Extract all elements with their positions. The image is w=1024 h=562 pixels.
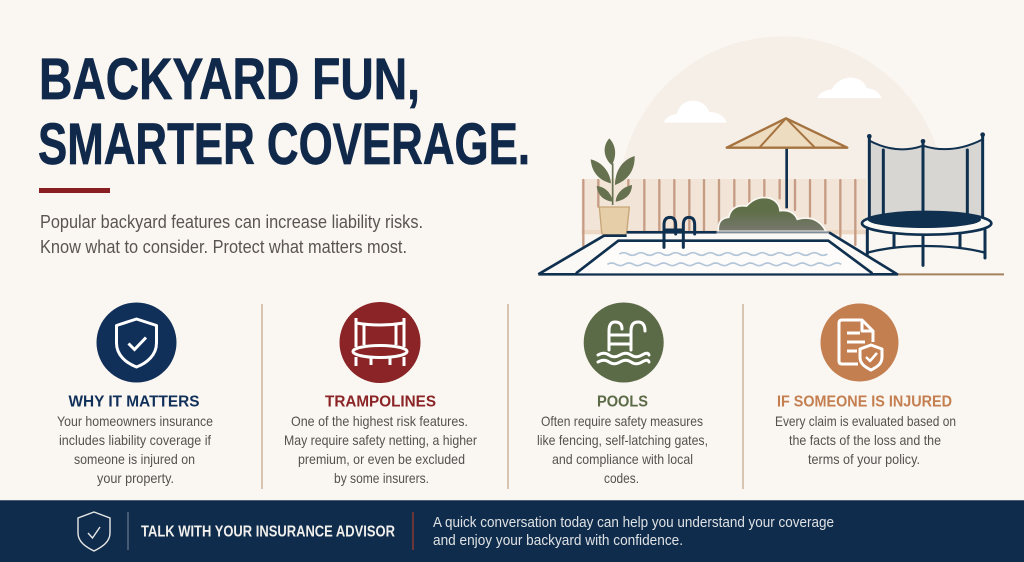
body text: Often require safety measures xyxy=(541,413,703,429)
body text: premium, or even be excluded xyxy=(298,451,465,467)
body text xyxy=(537,413,708,486)
footer banner xyxy=(0,500,1024,562)
icon: shield check xyxy=(96,302,176,382)
ground line xyxy=(898,271,1004,277)
clouds xyxy=(664,78,882,123)
body text xyxy=(284,413,477,486)
body text: terms of your policy. xyxy=(808,451,920,467)
pool ladder xyxy=(664,217,695,247)
icon: document with shield xyxy=(820,304,898,382)
column dividers xyxy=(262,304,743,489)
title accent bar xyxy=(39,188,110,193)
heading: TRAMPOLINES xyxy=(325,394,436,410)
fence xyxy=(582,179,867,246)
potted plant xyxy=(591,138,635,235)
footer heading: TALK WITH YOUR INSURANCE ADVISOR xyxy=(141,524,395,540)
patio umbrella xyxy=(727,118,847,208)
panel: if someone is injured xyxy=(775,304,956,467)
body text: by some insurers. xyxy=(334,470,429,486)
icon: footer shield xyxy=(78,512,110,551)
body text xyxy=(775,413,956,467)
footer text: and enjoy your backyard with confidence. xyxy=(433,533,683,549)
heading: POOLS xyxy=(597,394,648,410)
footer text: A quick conversation today can help you understand your coverage xyxy=(433,515,834,531)
body text: Your homeowners insurance xyxy=(57,413,213,429)
panel: why it matters xyxy=(57,302,213,486)
heading: WHY IT MATTERS xyxy=(68,394,200,410)
heading: IF SOMEONE IS INJURED xyxy=(777,394,952,410)
subtitle: Know what to consider. Protect what matters most. xyxy=(40,237,407,257)
body text: your property. xyxy=(97,470,174,486)
footer text xyxy=(433,515,834,549)
body text: like fencing, self-latching gates, xyxy=(537,432,708,448)
water waves xyxy=(607,253,841,266)
icon: pool ladder xyxy=(584,302,664,382)
sun backdrop xyxy=(620,36,944,179)
panel: trampolines xyxy=(284,302,477,486)
icon: trampoline xyxy=(340,302,420,383)
body text: Every claim is evaluated based on xyxy=(775,413,956,429)
title: BACKYARD FUN, xyxy=(39,47,420,112)
body text: includes liability coverage if xyxy=(59,432,211,448)
body text: and compliance with local xyxy=(552,451,693,467)
body text: May require safety netting, a higher xyxy=(284,432,477,448)
body text: codes. xyxy=(604,470,639,486)
trampoline xyxy=(862,132,991,265)
illustration: backyard scene xyxy=(538,36,1004,274)
panel: pools xyxy=(537,302,708,486)
body text: someone is injured on xyxy=(74,451,195,467)
pool xyxy=(538,217,897,274)
body text: the facts of the loss and the xyxy=(789,432,941,448)
title: SMARTER COVERAGE. xyxy=(38,112,530,177)
subtitle xyxy=(40,212,423,257)
body text: One of the highest risk features. xyxy=(291,413,468,429)
body text xyxy=(57,413,213,486)
title xyxy=(38,47,530,177)
subtitle: Popular backyard features can increase liability risks. xyxy=(40,212,423,232)
